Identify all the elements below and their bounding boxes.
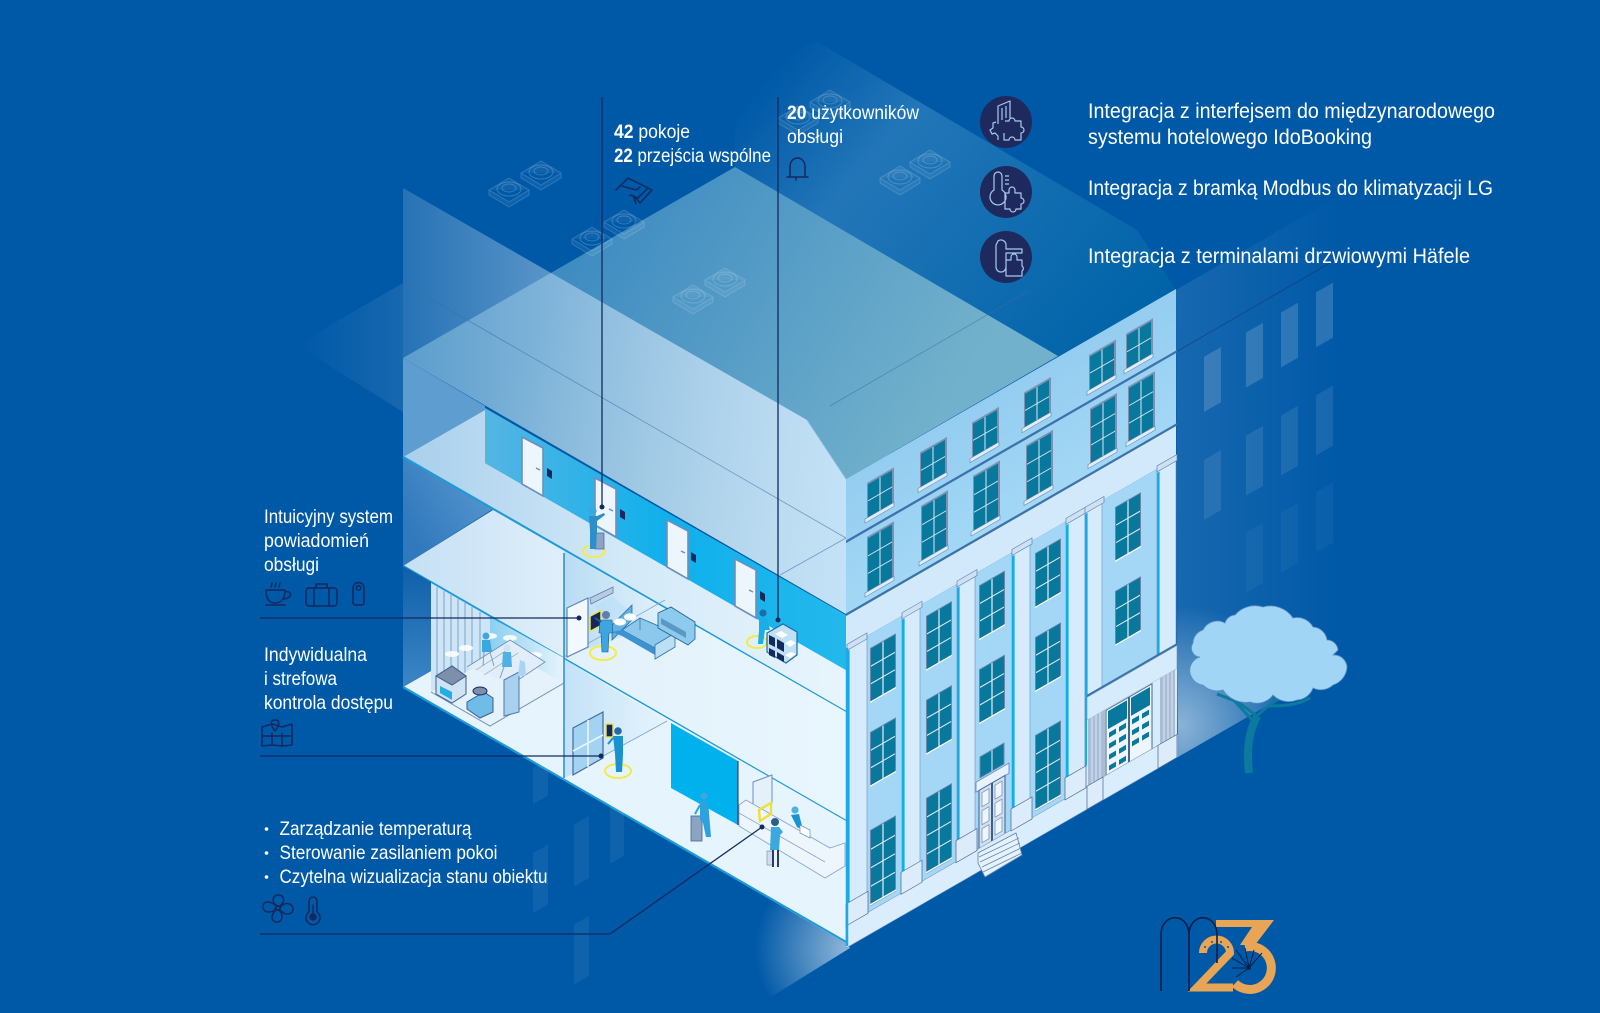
text: notifications: powiadomień xyxy=(264,530,369,552)
integration badge 3 xyxy=(980,231,1032,283)
entrance canopy and door xyxy=(976,763,1009,792)
slab edge and building junction xyxy=(403,687,846,942)
corridor doors and switches xyxy=(522,437,765,618)
room furniture xyxy=(640,607,695,645)
text: access control xyxy=(264,644,393,714)
integration badge 2 xyxy=(980,166,1032,218)
text: 42 pokoje: 42 pokoje xyxy=(614,121,690,143)
icon: hand with card xyxy=(616,178,652,204)
cyan pilaster edges xyxy=(847,471,1160,903)
text: 20 uzytkownikow: 20 użytkowników xyxy=(787,102,920,124)
lobby panel and person xyxy=(605,724,631,778)
right bay entablature and portal xyxy=(1087,645,1177,720)
icon: suitcase xyxy=(306,584,337,606)
corridor cyan wall xyxy=(485,408,846,670)
text: bullet list: Zarządzanie temperaturą xyxy=(280,818,472,840)
cornices xyxy=(846,350,1177,836)
text: bullet list: Czytelna wizualizacja stanu obiektu xyxy=(280,866,548,888)
wall tablet with yellow outline xyxy=(590,610,601,631)
upper windows xyxy=(865,467,894,523)
floor 2 slab xyxy=(403,510,846,821)
pilasters xyxy=(847,458,1176,947)
side shaft between roof and corridor xyxy=(403,358,485,457)
tree xyxy=(1190,606,1347,773)
text: notifications: Intuicyjny system xyxy=(264,506,393,528)
traveller with suitcase xyxy=(691,792,711,841)
lower windows xyxy=(870,633,896,703)
cyan wall reception xyxy=(671,723,738,825)
icon: coffee cup xyxy=(266,583,290,605)
text: bullet list: Sterowanie zasilaniem pokoi xyxy=(280,842,498,864)
guest room back wall xyxy=(564,551,678,657)
room door xyxy=(567,598,588,657)
translucent cut-away upper wall xyxy=(403,188,846,614)
text: 22 przejscia: 22 przejścia wspólne xyxy=(614,145,771,167)
ghost plane left of building xyxy=(296,283,403,412)
entrance steps xyxy=(978,833,1022,877)
icon: thermometer xyxy=(306,897,320,925)
guest at corridor door xyxy=(583,507,605,557)
housekeeper with cart xyxy=(747,609,797,663)
leader lines xyxy=(260,97,780,934)
person in room with ring xyxy=(590,611,616,660)
text: integration 3: Integracja z terminalami drzwiowymi Häfele xyxy=(1088,244,1470,268)
guest at reception xyxy=(767,818,783,867)
text: obslugi: obsługi xyxy=(787,126,843,148)
side gap beside kitchen xyxy=(403,566,431,687)
text: integration 1 xyxy=(1088,99,1495,149)
integration badge 1 xyxy=(980,96,1032,148)
icon: map pin xyxy=(262,720,292,746)
kitchen room xyxy=(431,583,564,726)
icon: door hanger xyxy=(353,582,364,605)
lobby double door xyxy=(573,712,603,775)
floor 3 side gap xyxy=(403,457,493,566)
text: integration 1: Integracja z interfejsem do międzynarodowego xyxy=(1088,99,1495,123)
building facade xyxy=(846,288,1178,948)
ghost building on right with faded windows xyxy=(1176,195,1340,757)
text: integration 2: Integracja z bramką Modbus do klimatyzacji LG xyxy=(1088,176,1493,200)
ghost windows in lower left xyxy=(533,716,624,1008)
lobby back wall xyxy=(565,660,667,778)
capitals xyxy=(847,454,1177,650)
glow under corner xyxy=(715,870,850,1013)
building left corner edge xyxy=(846,648,848,946)
air conditioner xyxy=(590,587,636,634)
vertical partition line xyxy=(563,553,565,778)
text: integration 1: systemu hotelowego IdoBooking xyxy=(1088,125,1372,149)
roof main plane xyxy=(403,167,1058,614)
text: access control: Indywidualna xyxy=(264,644,367,666)
floor 1 slab xyxy=(403,627,846,942)
roof vents xyxy=(489,90,950,314)
icon: fan xyxy=(263,895,293,922)
text: notifications: obsługi xyxy=(264,554,319,576)
text: access control: i strefowa xyxy=(264,668,337,690)
logo m23 xyxy=(1161,918,1274,991)
icon: bell xyxy=(787,158,808,180)
plinth and pilaster bases xyxy=(846,734,1178,948)
text: access control: kontrola dostępu xyxy=(264,692,393,714)
bed xyxy=(612,605,675,659)
ghost far roof plane xyxy=(735,41,1176,356)
reception desk and door xyxy=(739,775,845,878)
floor 3 corridor slab xyxy=(403,410,846,712)
text: bullet list xyxy=(265,818,548,888)
text: notifications xyxy=(264,506,393,576)
